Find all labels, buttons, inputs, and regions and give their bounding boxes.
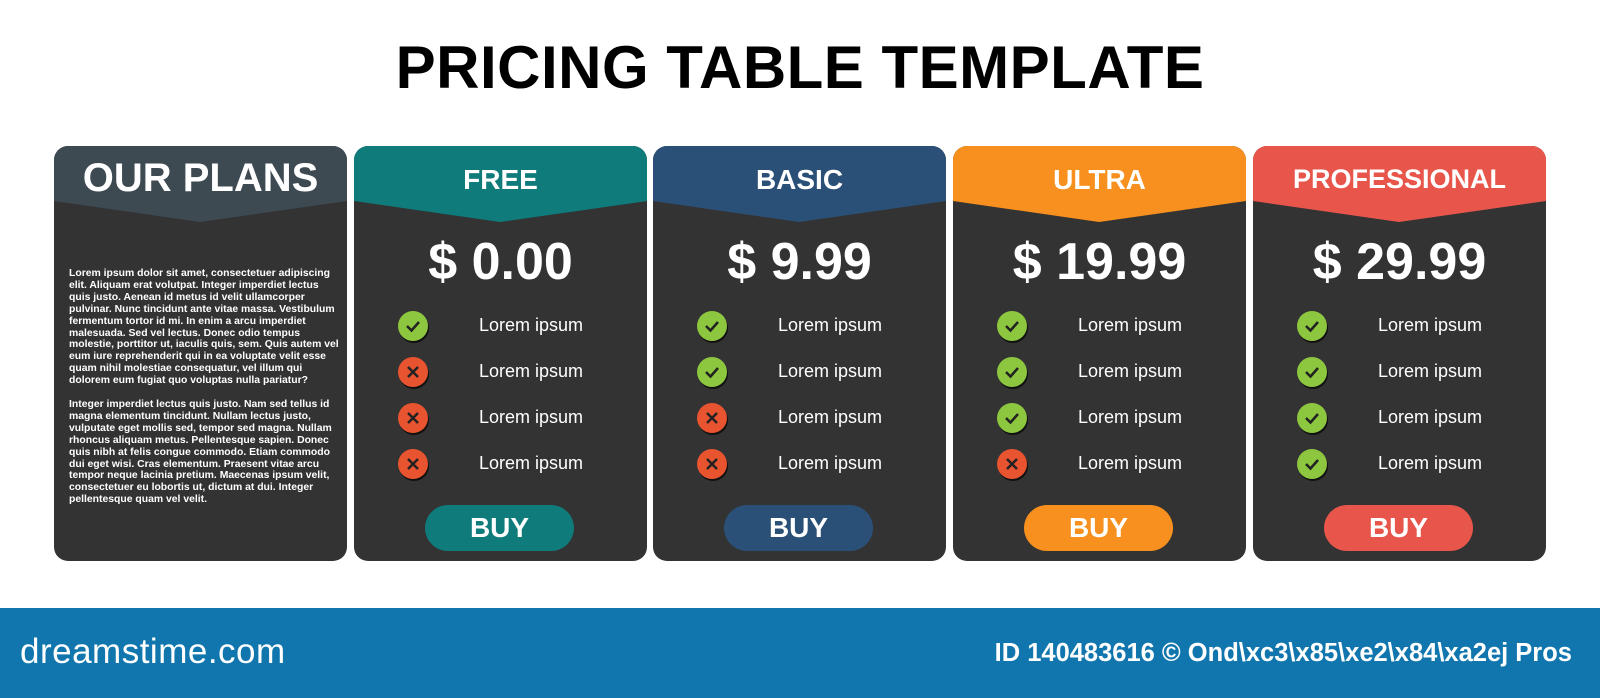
description text: Lorem ipsum dolor sit amet, consectetuer adipiscing elit. Aliquam erat volutpat. Integer imperdiet lectus quis justo. Aenean id metus id velit ullamcorper pulvinar. Nunc tincidunt ante vitae massa. Vestibulum fermentum tortor id mi. In enim a arcu imperdiet malesuada. Sed vel lectus. Donec odio tempus molestie, porttitor ut, iaculis quis, sem. Quis autem vel eum iure reprehenderit qui in ea voluptate velit esse quam nihil molestiae consequatur, vel illum qui dolorem eum fugiat quo voluptas nulla pariatur? [69,268,339,386]
panel: professional [1253,146,1546,561]
feature list: Lorem ipsum [1078,407,1182,427]
header: ultra [953,146,1246,222]
feature list [1297,311,1482,481]
buy button: BUY [769,512,828,543]
buy button [724,505,873,551]
feature list: Lorem ipsum [1378,315,1482,335]
feature list: Lorem ipsum [479,407,583,427]
feature list [997,311,1182,481]
header: basic: BASIC [756,164,843,195]
buy button: BUY [1069,512,1128,543]
header: free [354,146,647,222]
header: free: FREE [463,164,538,195]
header: professional: PROFESSIONAL [1293,164,1506,194]
description text: Integer imperdiet lectus quis justo. Nam sed tellus id magna elementum tincidunt. Nullam lectus justo, vulputate eget mollis sed, tempor sed magna. Nullam rhoncus aliquam metus. Pellentesque sapien. Donec quis nibh at felis congue commodo. Etiam commodo dui eget wisi. Cras elementum. Praesent vitae arcu tempor neque lacinia pretium. Maecenas ipsum velit, consectetuer eu lobortis ut, dictum at dui. Integer pellentesque quam vel velit. [69,399,332,505]
feature list: Lorem ipsum [479,361,583,381]
feature list [697,311,882,481]
feature list: Lorem ipsum [778,453,882,473]
panel: free [354,146,647,561]
price: $ 0.00 [428,233,573,291]
feature list: Lorem ipsum [778,407,882,427]
header: basic [653,146,946,222]
price: $ 19.99 [1013,233,1186,291]
panel: ultra [953,146,1246,561]
feature list: Lorem ipsum [1078,361,1182,381]
feature list [398,311,583,481]
feature list: Lorem ipsum [778,361,882,381]
title: PRICING TABLE TEMPLATE [396,34,1204,101]
price: $ 9.99 [727,233,872,291]
feature list: Lorem ipsum [1078,453,1182,473]
feature list: Lorem ipsum [1078,315,1182,335]
buy button: BUY [470,512,529,543]
footer logo: dreamstime.com [20,632,286,671]
price: $ 29.99 [1313,233,1486,291]
feature list: Lorem ipsum [1378,407,1482,427]
panel: basic [653,146,946,561]
feature list: Lorem ipsum [479,315,583,335]
buy button: BUY [1369,512,1428,543]
panel: our plans [54,146,347,561]
feature list: Lorem ipsum [778,315,882,335]
buy button [1324,505,1473,551]
header: ultra: ULTRA [1053,164,1146,195]
buy button [425,505,574,551]
footer bar [0,608,1600,698]
feature list: Lorem ipsum [479,453,583,473]
description text [69,268,339,505]
header band [54,146,347,222]
header band: OUR PLANS [83,156,318,200]
feature list: Lorem ipsum [1378,453,1482,473]
buy button [1024,505,1173,551]
footer id: ID 140483616 © Ond\xc3\x85\xe2\x84\xa2ej Pros [995,639,1572,667]
feature list: Lorem ipsum [1378,361,1482,381]
header: professional [1253,146,1546,222]
